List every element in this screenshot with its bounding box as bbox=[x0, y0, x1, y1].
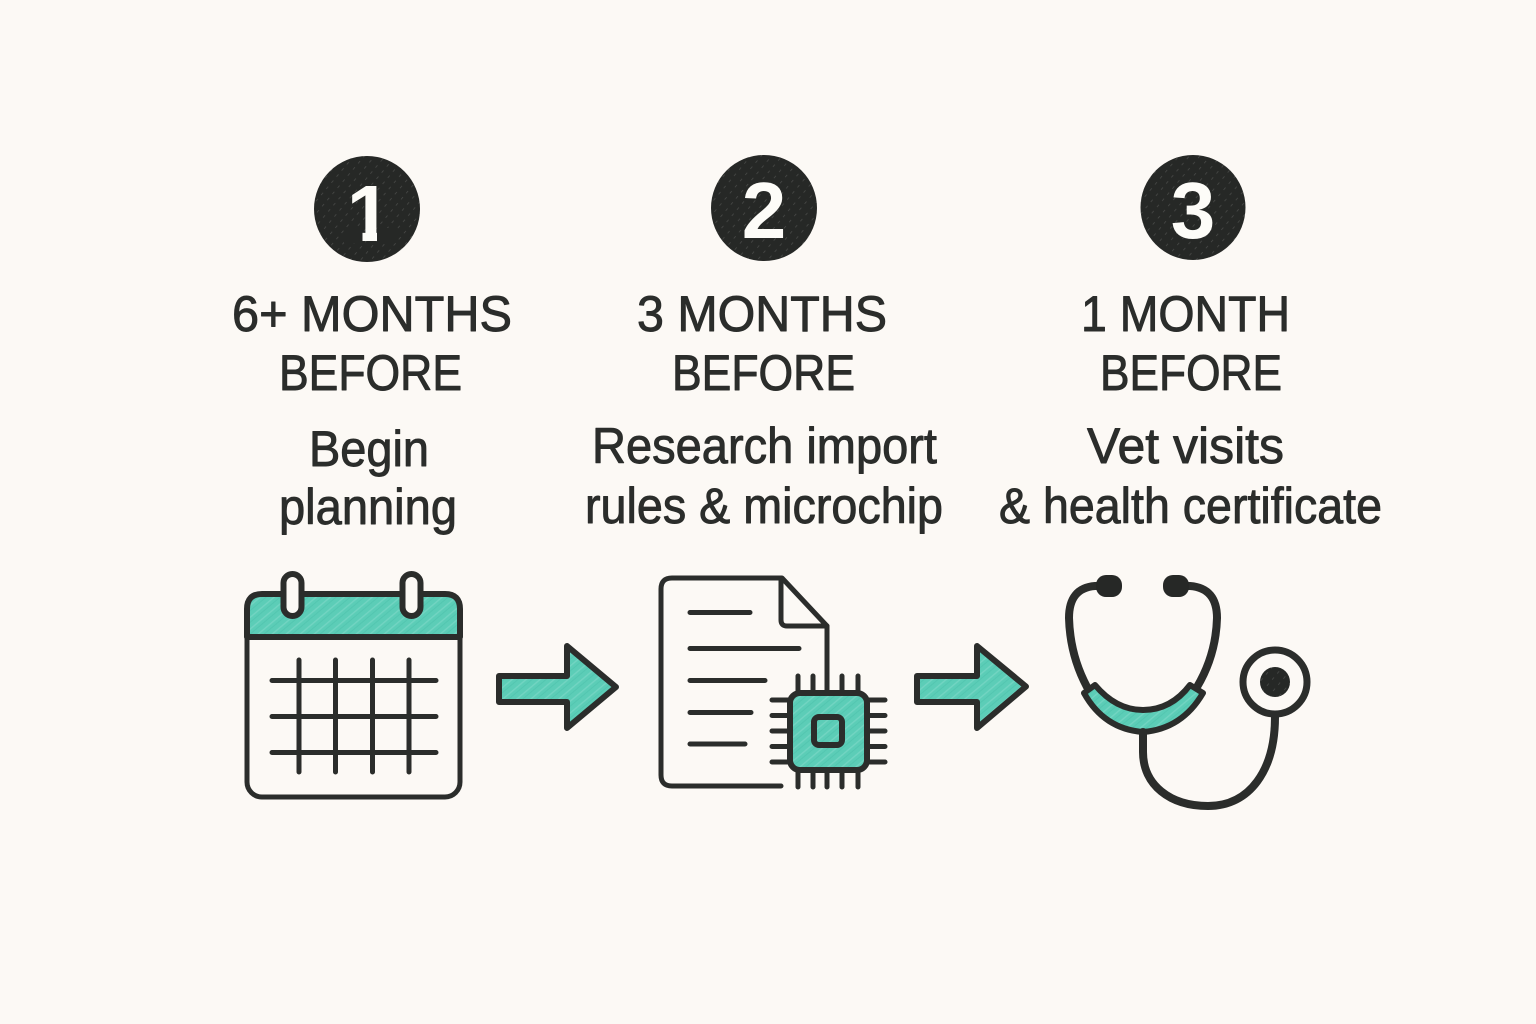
heading: 6+ months before: BEFORE bbox=[279, 345, 462, 401]
arrow: step 2 to step 3 bbox=[917, 646, 1026, 728]
icon: stethoscope bbox=[1069, 575, 1307, 806]
number badge 3 bbox=[1140, 155, 1246, 260]
icon: document with microchip bbox=[661, 578, 885, 787]
description: vet visits and health certificate: & health certificate bbox=[999, 478, 1382, 534]
heading: 6+ months before bbox=[232, 286, 512, 401]
icon: calendar bbox=[247, 574, 460, 797]
number badge 1: 1 bbox=[347, 169, 391, 258]
step 1: 6+ months before bbox=[232, 156, 512, 797]
description: vet visits and health certificate: Vet visits bbox=[1087, 418, 1284, 474]
heading: 3 months before: 3 MONTHS bbox=[637, 286, 887, 342]
step 2: 3 months before bbox=[585, 155, 943, 787]
number badge 2: 2 bbox=[742, 166, 786, 255]
document bbox=[661, 578, 827, 786]
description: research import rules and microchip: Research import bbox=[592, 418, 937, 474]
description: research import rules and microchip: rules & microchip bbox=[585, 478, 943, 534]
heading: 1 month before: BEFORE bbox=[1100, 345, 1282, 401]
heading: 3 months before bbox=[637, 286, 887, 401]
description: vet visits and health certificate bbox=[999, 418, 1382, 534]
description: begin planning: Begin bbox=[309, 421, 429, 477]
heading: 1 month before: 1 MONTH bbox=[1081, 286, 1290, 342]
heading: 6+ months before: 6+ MONTHS bbox=[232, 286, 512, 342]
arrow: step 1 to step 2 bbox=[499, 646, 616, 728]
number badge 3: 3 bbox=[1171, 166, 1215, 255]
heading: 3 months before: BEFORE bbox=[672, 345, 855, 401]
microchip bbox=[772, 676, 885, 787]
number badge 1 bbox=[314, 156, 420, 262]
heading: 1 month before bbox=[1081, 286, 1290, 401]
description: research import rules and microchip bbox=[585, 418, 943, 534]
description: begin planning bbox=[279, 421, 457, 535]
number badge 2 bbox=[711, 155, 817, 261]
description: begin planning: planning bbox=[279, 479, 457, 535]
step 3: 1 month before bbox=[999, 155, 1382, 806]
